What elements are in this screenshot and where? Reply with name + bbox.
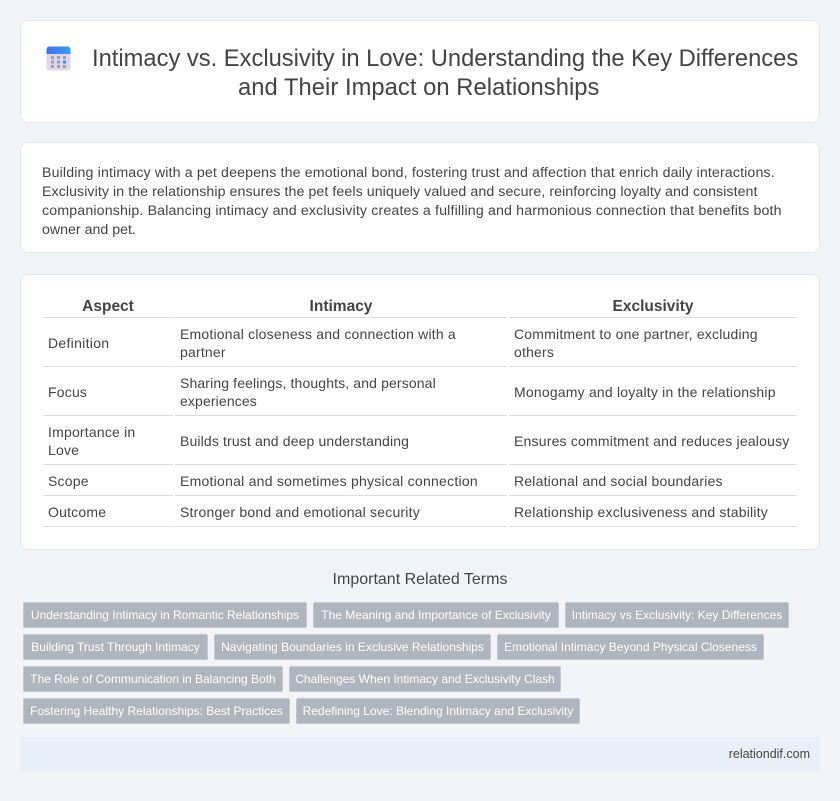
- Importance: Intimacy: Builds trust and deep understanding: [180, 433, 409, 449]
- related terms tags: [23, 602, 789, 724]
- Definition: Intimacy: [180, 326, 456, 360]
- panel: title card: [20, 20, 820, 123]
- Definition: Intimacy: partner: [180, 344, 226, 360]
- row: Importance in Love: Love: [48, 442, 79, 458]
- Importance: Exclusivity: Ensures commitment and reduces jealousy: [514, 433, 789, 449]
- Focus: Intimacy: Sharing feelings, thoughts, and personal: [180, 375, 436, 391]
- table header: Intimacy: Intimacy: [310, 298, 372, 315]
- tag: Emotional Intimacy Beyond Physical Closeness: [504, 640, 757, 654]
- Definition: Intimacy: Emotional closeness and connection with a: [180, 326, 456, 342]
- row: Outcome: Outcome: [48, 504, 106, 520]
- tag: Understanding Intimacy in Romantic Relationships: [31, 608, 299, 622]
- tag: Navigating Boundaries in Exclusive Relationships: [221, 640, 484, 654]
- title: and Their Impact on Relationships: [238, 75, 599, 101]
- title: [92, 46, 798, 101]
- Focus: Intimacy: [180, 375, 436, 409]
- table header: Aspect: Aspect: [82, 298, 134, 315]
- text block: introduction: owner and pet.: [42, 222, 136, 238]
- tag: Challenges When Intimacy and Exclusivity Clash: [295, 672, 555, 686]
- row: Importance in Love: Importance in: [48, 424, 135, 440]
- Definition: Exclusivity: [514, 326, 758, 360]
- tag: [497, 634, 764, 660]
- Outcome: Exclusivity: Relationship exclusiveness and stability: [514, 504, 768, 520]
- tag: [23, 698, 290, 724]
- tag: [23, 602, 307, 628]
- panel: comparison table: [20, 274, 820, 550]
- row: Definition: Definition: [48, 335, 109, 351]
- heading: related terms: Important Related Terms: [333, 571, 507, 588]
- tag: Redefining Love: Blending Intimacy and Exclusivity: [303, 704, 573, 718]
- text block: introduction: Building intimacy with a pet deepens the emotional bond, fostering trust and affection that enrich daily interactions.: [42, 165, 775, 181]
- Outcome: Intimacy: Stronger bond and emotional security: [180, 504, 420, 520]
- tag: [565, 602, 789, 628]
- row: Focus: Focus: [48, 384, 87, 400]
- tag: Intimacy vs Exclusivity: Key Differences: [572, 608, 782, 622]
- tag: Building Trust Through Intimacy: [31, 640, 200, 654]
- title: Intimacy vs. Exclusivity in Love: Understanding the Key Differences: [92, 46, 798, 72]
- panel: introduction: [20, 142, 820, 253]
- Focus: Intimacy: experiences: [180, 393, 257, 409]
- icon: calendar: [46, 46, 70, 70]
- tag: The Meaning and Importance of Exclusivity: [321, 608, 551, 622]
- tag: The Role of Communication in Balancing Both: [30, 672, 276, 686]
- Definition: Exclusivity: others: [514, 344, 554, 360]
- Scope: Exclusivity: Relational and social boundaries: [514, 473, 723, 489]
- Focus: Exclusivity: Monogamy and loyalty in the relationship: [514, 384, 776, 400]
- row: Importance in Love: [48, 424, 135, 458]
- footer: site name: relationdif.com: [729, 747, 810, 761]
- comparison table: [43, 298, 797, 527]
- tag: [23, 666, 283, 692]
- tag: [313, 602, 559, 628]
- Scope: Intimacy: Emotional and sometimes physical connection: [180, 473, 478, 489]
- footer bar: [20, 737, 820, 771]
- row: Scope: Scope: [48, 473, 89, 489]
- tag: [289, 666, 561, 692]
- table header: Exclusivity: Exclusivity: [612, 298, 694, 315]
- tag: [214, 634, 491, 660]
- tag: Fostering Healthy Relationships: Best Practices: [30, 704, 283, 718]
- text block: introduction: companionship. Balancing intimacy and exclusivity creates a fulfilling and harmonious connection that benefits both: [42, 203, 782, 219]
- tag: [296, 698, 580, 724]
- Definition: Exclusivity: Commitment to one partner, excluding: [514, 326, 758, 342]
- text block: introduction: [42, 165, 782, 238]
- text block: introduction: Exclusivity in the relationship ensures the pet feels uniquely valued and secure, reinforcing loyalty and consistent: [42, 184, 758, 200]
- tag: [23, 634, 208, 660]
